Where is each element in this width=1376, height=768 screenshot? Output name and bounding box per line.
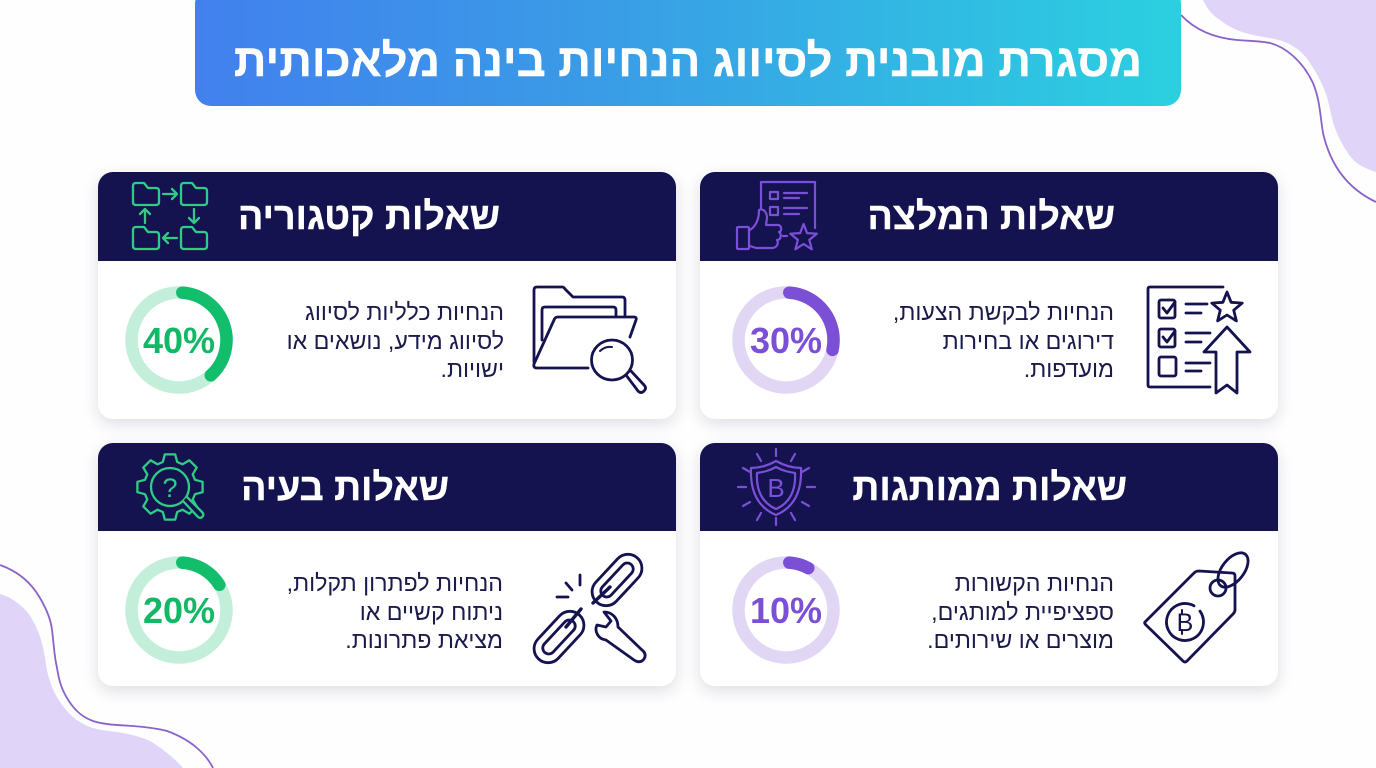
header bar <box>98 172 676 261</box>
heading: שאלות בעיה <box>241 466 449 508</box>
title banner <box>195 0 1181 106</box>
progress ring: 10% <box>732 556 840 664</box>
icon: price tag with coin: B <box>1177 609 1193 637</box>
description text: מועדפות. <box>1024 356 1114 382</box>
icon: checklist with star and arrow <box>1146 286 1252 394</box>
progress ring: 40%: 40% <box>143 320 215 361</box>
icon: shield with rays <box>737 448 816 526</box>
icon: price tag with coin <box>1143 551 1250 664</box>
heading: שאלות המלצה <box>868 195 1115 237</box>
progress ring: 30%: 30% <box>750 320 822 361</box>
description text: מוצרים או שירותים. <box>927 627 1114 653</box>
description text: הנחיות הקשורות <box>955 570 1114 596</box>
description text: דירוגים או בחירות <box>943 328 1114 354</box>
icon: gear with question mark: ? <box>162 473 178 503</box>
description text: הנחיות לבקשת הצעות, <box>893 299 1114 325</box>
icon: folder with magnifier <box>532 286 647 394</box>
description text: מציאת פתרונות. <box>345 627 503 653</box>
description text <box>893 299 1114 382</box>
description text <box>287 570 503 653</box>
panel: branded questions <box>700 443 1278 686</box>
header bar <box>700 172 1278 261</box>
panel: category questions <box>98 172 676 419</box>
panel: recommendation questions <box>700 172 1278 419</box>
progress ring: 20% <box>125 556 233 664</box>
description text: ספציפיית למותגים, <box>931 598 1114 624</box>
decorative blob and curve: top right <box>1181 0 1376 203</box>
description text: ישויות. <box>441 356 504 382</box>
icon: gear with question mark <box>136 453 204 521</box>
decorative blob and curve: bottom left <box>0 564 214 768</box>
description text <box>927 570 1114 653</box>
panel: problem questions <box>98 443 676 686</box>
header bar <box>700 443 1278 531</box>
heading: שאלות קטגוריה <box>238 195 500 237</box>
progress ring: 40% <box>125 286 233 394</box>
description text: לסיווג מידע, נושאים או <box>287 328 504 354</box>
description text <box>287 299 504 382</box>
description text: ניתוח קשיים או <box>360 598 503 624</box>
title: מסגרת מובנית לסיווג הנחיות בינה מלאכותית <box>234 35 1142 86</box>
description text: הנחיות כלליות לסיווג <box>305 299 504 325</box>
icon: thumbs up with list and star <box>736 180 818 250</box>
progress ring: 10%: 10% <box>750 590 822 631</box>
progress ring: 30% <box>732 286 840 394</box>
progress ring: 20%: 20% <box>143 590 215 631</box>
icon: broken chain with wrench <box>532 552 647 664</box>
header bar <box>98 443 676 531</box>
description text: הנחיות לפתרון תקלות, <box>287 570 503 596</box>
icon: folders cycle <box>132 182 208 250</box>
heading: שאלות ממותגות <box>852 466 1127 508</box>
icon: shield with rays: B <box>767 473 785 503</box>
